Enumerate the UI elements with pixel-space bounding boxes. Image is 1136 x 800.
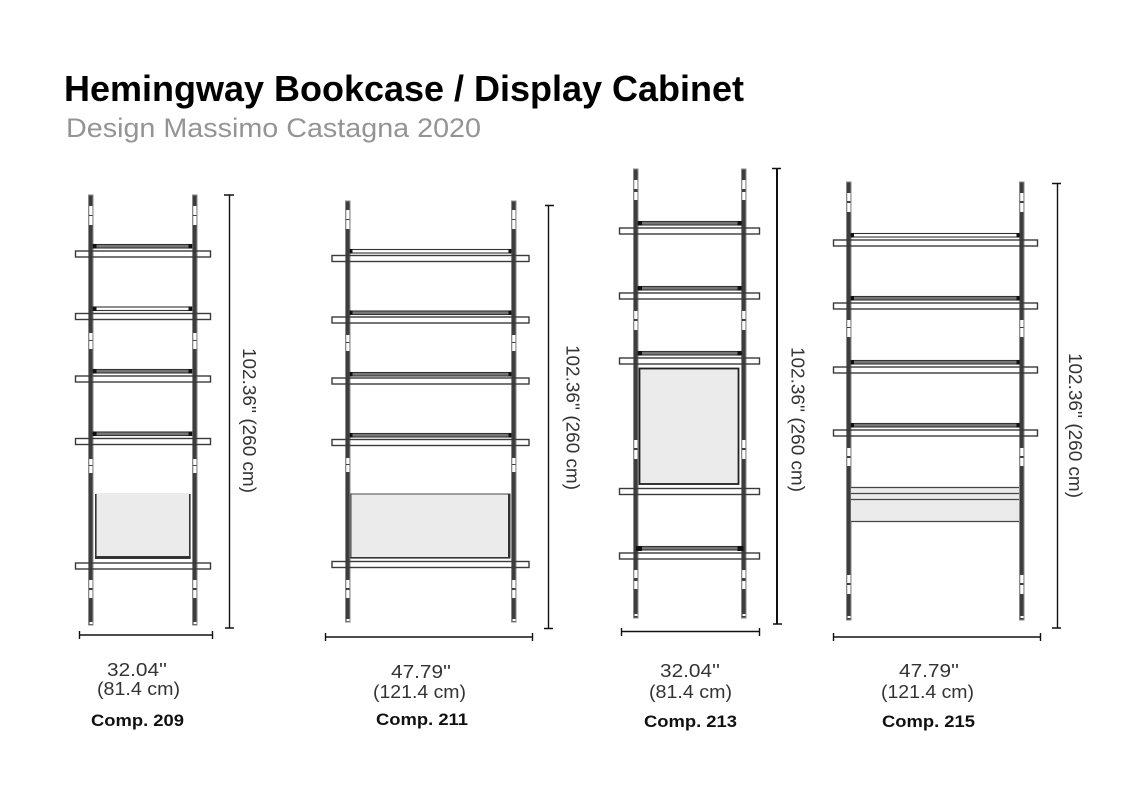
- storage box: [640, 368, 738, 484]
- height dimension: Comp. 211: 102.36'' (260 cm): [562, 345, 582, 490]
- height dimension: Comp. 215: 102.36'' (260 cm): [1065, 353, 1085, 498]
- height dimension: Comp. 213: 102.36'' (260 cm): [788, 347, 808, 492]
- storage box: [95, 493, 191, 559]
- height dimension: Comp. 209: 102.36'' (260 cm): [239, 348, 259, 493]
- subtitle: Design Massimo Castagna 2020: [66, 113, 481, 143]
- label: Comp. 209: Comp. 209: [91, 711, 184, 730]
- storage box: [851, 487, 1019, 522]
- width dimension: Comp. 211: [326, 633, 532, 702]
- label: Comp. 215: Comp. 215: [882, 712, 975, 731]
- label: Comp. 211: Comp. 211: [376, 710, 468, 729]
- storage box: [350, 494, 510, 559]
- bookcase: Comp. 211: [332, 201, 529, 622]
- bookcase: Comp. 209: [76, 195, 210, 625]
- title: Hemingway Bookcase / Display Cabinet: [64, 68, 744, 109]
- height dimension: Comp. 213: [772, 168, 808, 624]
- width dimension: Comp. 213: 32.04'': [660, 661, 720, 681]
- width dimension: Comp. 211: 47.79'': [391, 662, 451, 682]
- height dimension: Comp. 211: [544, 206, 582, 628]
- width dimension: Comp. 213: [622, 628, 760, 702]
- height dimension: Comp. 209: [224, 195, 259, 628]
- width dimension: Comp. 209: 32.04'': [107, 660, 167, 680]
- bookcase: Comp. 215: [834, 182, 1038, 620]
- width dimension: Comp. 213: (81.4 cm): [649, 682, 732, 702]
- width dimension: Comp. 211: (121.4 cm): [373, 682, 466, 702]
- width dimension: Comp. 215: [834, 633, 1040, 702]
- width dimension: Comp. 209: (81.4 cm): [97, 679, 180, 699]
- height dimension: Comp. 215: [1052, 184, 1085, 628]
- width dimension: Comp. 215: (121.4 cm): [881, 682, 974, 702]
- bookcase: Comp. 213: [620, 169, 760, 618]
- width dimension: Comp. 209: [80, 631, 212, 699]
- label: Comp. 213: Comp. 213: [644, 712, 737, 731]
- width dimension: Comp. 215: 47.79'': [899, 661, 959, 681]
